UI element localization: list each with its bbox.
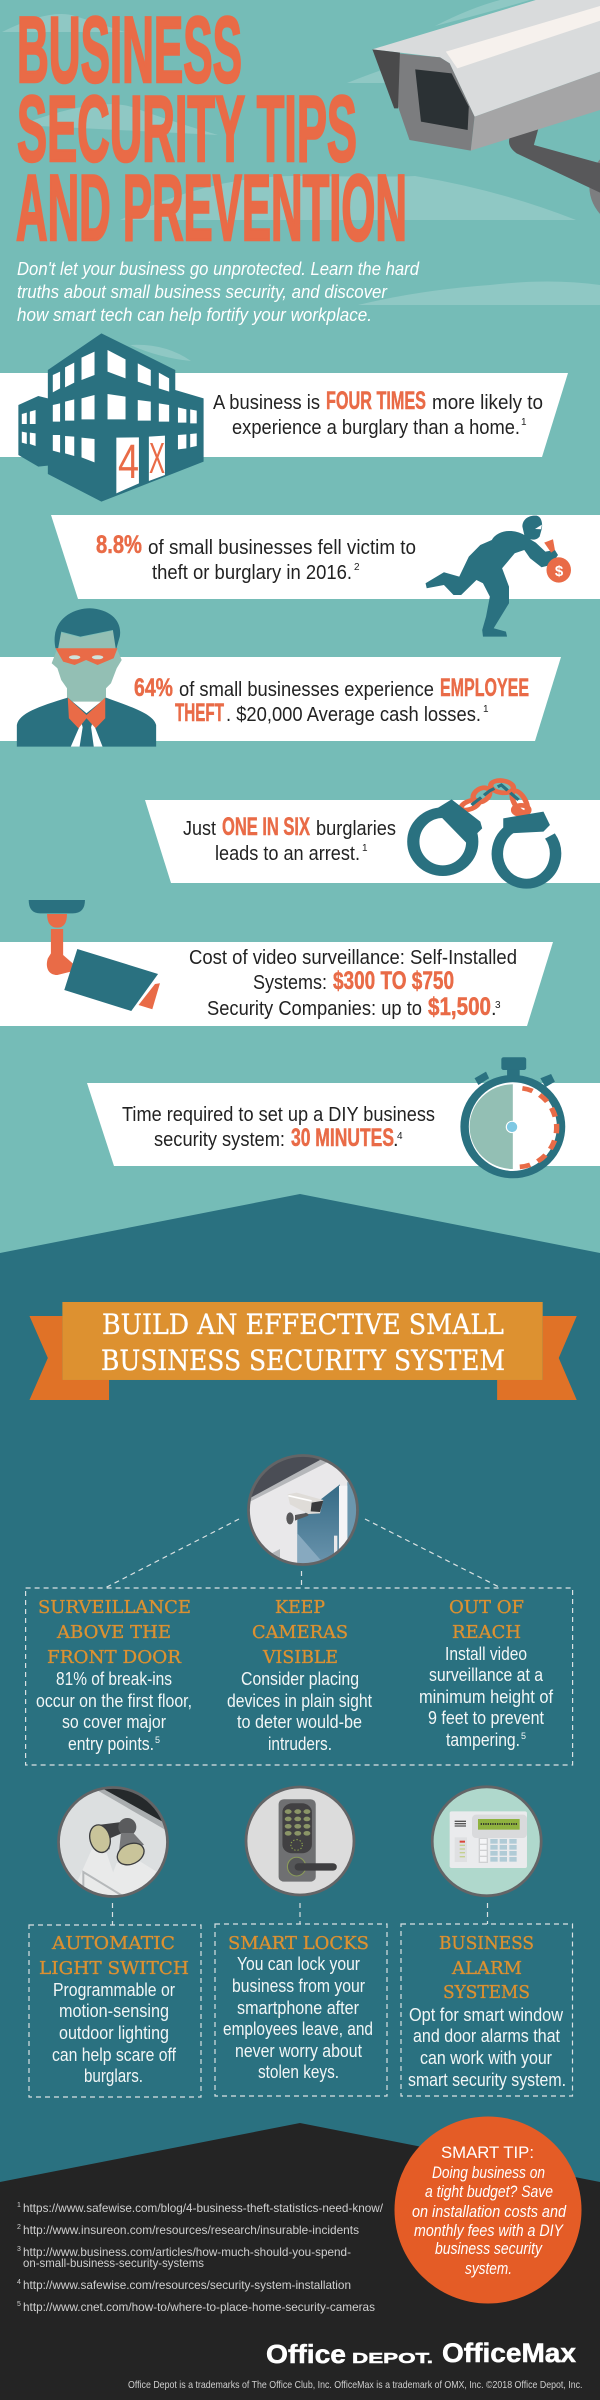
panel: business alarm systems: smart security system. [408, 2070, 566, 2090]
logo: Office Depot OfficeMax: Office [266, 2339, 346, 2369]
illustration: outdoor lights [58, 1786, 170, 1898]
stat text: of small businesses fell victim to [148, 537, 416, 559]
stat text: 30 MINUTES [291, 1124, 394, 1152]
icon: burglar with money bag [426, 516, 571, 637]
stat text: . $20,000 Average cash losses. [226, 704, 481, 726]
footnotes: http://www.business.com/articles/how-much-should-you-spend- [23, 2245, 351, 2259]
intro text [17, 258, 420, 325]
panel: smart locks: business from your [232, 1976, 365, 1996]
callout: smart tip: Doing business on [432, 2163, 545, 2182]
footnotes: 5 [17, 2301, 21, 2308]
panel: automatic light switch: Programmable or [53, 1980, 175, 2000]
panel: thirty minutes [87, 1057, 600, 1175]
icon: handcuffs [413, 779, 556, 884]
tip: out of reach: 9 feet to prevent [428, 1708, 544, 1728]
footnotes: http://www.insureon.com/resources/research/insurable-incidents [23, 2223, 359, 2237]
footer background [0, 2123, 600, 2400]
stat text: 4 [397, 1131, 403, 1142]
tip: surveillance above the front door: SURVEILLANCE [38, 1597, 191, 1618]
callout: smart tip: monthly fees with a DIY [414, 2221, 564, 2240]
icon: ceiling camera [29, 900, 160, 1011]
stat text: Systems: [253, 972, 327, 994]
panel: four times [0, 333, 568, 502]
stat text [134, 674, 529, 727]
stat text: 8.8% [96, 531, 142, 559]
footnotes: http://www.cnet.com/how-to/where-to-place-home-security-cameras [23, 2300, 375, 2314]
footnotes: 4 [17, 2279, 21, 2286]
title: BUSINESS [17, 0, 242, 102]
panel: four times: X [149, 434, 165, 483]
panel: smart locks: never worry about [235, 2041, 362, 2061]
tip: keep cameras visible [227, 1597, 372, 1754]
tip: keep cameras visible: devices in plain sight [227, 1691, 372, 1711]
stat text [122, 1104, 435, 1152]
footnotes: http://www.safewise.com/resources/security-system-installation [23, 2278, 351, 2292]
icon: office building [18, 333, 204, 502]
callout: smart tip: a tight budget? Save [425, 2182, 553, 2201]
panel: business alarm systems: and door alarms that [413, 2026, 560, 2046]
logo: Office Depot OfficeMax: OfficeMax [442, 2338, 576, 2368]
footnotes: 3 [17, 2246, 21, 2253]
illustration: alarm panel [432, 1787, 541, 1896]
panel: employee theft [0, 608, 561, 747]
panel: smart locks: SMART LOCKS [228, 1933, 369, 1954]
stat text: burglaries [316, 818, 396, 840]
illustration: camera above door [243, 1448, 360, 1565]
tip: surveillance above the front door: occur on the first floor, [36, 1691, 192, 1711]
panel: smart locks: stolen keys. [258, 2062, 339, 2082]
intro text: how smart tech can help fortify your workplace. [17, 304, 372, 325]
section heading ribbon: BUILD AN EFFECTIVE SMALL [102, 1308, 504, 1341]
tip: keep cameras visible: CAMERAS [252, 1622, 348, 1643]
stat text: . [491, 998, 497, 1020]
stat text: more likely to [432, 392, 543, 414]
tip: surveillance above the front door: so cover major [62, 1712, 166, 1732]
stat text [96, 531, 416, 584]
stat text: THEFT [175, 699, 224, 727]
panel: automatic light switch: motion-sensing [59, 2001, 169, 2021]
stat text: Just [183, 818, 216, 840]
callout: smart tip: on installation costs and [412, 2202, 566, 2221]
callout: smart tip: business security [435, 2239, 543, 2258]
tip: surveillance above the front door: 5 [155, 1735, 160, 1745]
panel: business alarm systems: Opt for smart window [409, 2005, 564, 2025]
panel: automatic light switch: AUTOMATIC [51, 1933, 175, 1954]
intro text: Don't let your business go unprotected. Learn the hard [17, 258, 420, 279]
panel: business alarm systems [401, 1924, 572, 2096]
tip: keep cameras visible: intruders. [268, 1734, 332, 1754]
stat text: 1 [521, 417, 527, 428]
footnotes: 2 [17, 2224, 21, 2231]
stat text: 3 [495, 1000, 501, 1011]
panel: automatic light switch: LIGHT SWITCH [39, 1958, 189, 1979]
footnotes: on-small-business-security-systems [23, 2256, 204, 2270]
panel: surveillance cost [0, 900, 553, 1026]
tip: surveillance above the front door: 81% of break-ins [56, 1669, 172, 1689]
panel: camera placement tips [26, 1588, 573, 1765]
tip: keep cameras visible: KEEP [275, 1597, 325, 1618]
stat text: 2 [354, 562, 360, 573]
callout: smart tip: system. [465, 2259, 512, 2278]
tip: out of reach: 5 [521, 1731, 526, 1741]
stat text: security system: [154, 1129, 285, 1151]
stat text: $300 TO $750 [333, 967, 454, 995]
tip: out of reach: surveillance at a [429, 1665, 544, 1685]
panel: business alarm systems: can work with your [420, 2048, 552, 2068]
logo: Office Depot OfficeMax [266, 2338, 576, 2369]
stat text [189, 947, 517, 1021]
stat text: leads to an arrest. [215, 843, 360, 865]
callout: smart tip: SMART TIP: [441, 2143, 534, 2162]
panel: smart locks [215, 1924, 387, 2096]
stat text: . [393, 1129, 399, 1151]
stat text: Cost of video surveillance: Self-Installed [189, 947, 517, 969]
connector lines [112, 1903, 488, 1925]
tip: out of reach: tampering. [446, 1730, 520, 1750]
panel: build section background [0, 1194, 600, 2400]
icon: security camera [372, 0, 600, 230]
icon: masked employee [17, 608, 156, 747]
tip: keep cameras visible: VISIBLE [262, 1647, 338, 1668]
tip: surveillance above the front door: entry points. [68, 1734, 154, 1754]
logo: Office Depot OfficeMax: DEPOT. [352, 2350, 433, 2367]
panel: smart locks: employees leave, and [223, 2019, 373, 2039]
stat text: Time required to set up a DIY business [122, 1104, 435, 1126]
stat text: theft or burglary in 2016. [152, 562, 352, 584]
stat text: experience a burglary than a home. [232, 417, 520, 439]
panel: smart locks: smartphone after [237, 1998, 359, 2018]
panel: smart locks: You can lock your [237, 1954, 360, 1974]
stat text: EMPLOYEE [440, 674, 529, 702]
title [16, 0, 407, 260]
section heading ribbon: BUSINESS SECURITY SYSTEM [101, 1344, 505, 1377]
stat text: ONE IN SIX [222, 813, 310, 841]
tip: surveillance above the front door: ABOVE THE [56, 1622, 171, 1643]
stat text: 1 [483, 704, 489, 715]
panel: 8.8 percent [51, 515, 600, 637]
panel: business alarm systems: ALARM [451, 1958, 522, 1979]
tip: out of reach: minimum height of [419, 1687, 554, 1707]
section heading ribbon [29, 1302, 577, 1400]
stat text [183, 813, 396, 865]
tip: out of reach: REACH [452, 1622, 521, 1643]
connector lines [105, 1519, 501, 1588]
panel: business alarm systems: SYSTEMS [443, 1982, 530, 2003]
panel: business alarm systems: BUSINESS [439, 1933, 534, 1954]
stat text: 64% [134, 674, 173, 702]
footnotes: https://www.safewise.com/blog/4-business-theft-statistics-need-know/ [23, 2201, 384, 2215]
stat text [213, 387, 543, 439]
tip: keep cameras visible: to deter would-be [237, 1712, 362, 1732]
tip: keep cameras visible: Consider placing [241, 1669, 359, 1689]
tip: surveillance above the front door [36, 1597, 192, 1754]
callout: smart tip [394, 2116, 582, 2304]
tip: surveillance above the front door: FRONT DOOR [47, 1647, 181, 1668]
tip: out of reach: OUT OF [449, 1597, 524, 1618]
tip: out of reach [419, 1597, 554, 1750]
panel: automatic light switch: outdoor lighting [59, 2023, 169, 2043]
panel: automatic light switch: burglars. [84, 2066, 143, 2086]
intro text: truths about small business security, and discover [17, 281, 388, 302]
stat text: $1,500 [428, 993, 491, 1021]
panel: 8.8 percent: $ [555, 563, 564, 580]
stat text: A business is [213, 392, 320, 414]
stat text: of small businesses experience [179, 679, 434, 701]
panel: four times: 4 [118, 436, 139, 489]
icon: stopwatch [465, 1057, 561, 1175]
panel: one in six [145, 779, 600, 884]
panel: automatic light switch [29, 1925, 201, 2097]
footnotes: 1 [17, 2202, 21, 2209]
stat text: Security Companies: up to [207, 998, 422, 1020]
stat text: 1 [362, 843, 368, 854]
panel: automatic light switch: can help scare off [52, 2045, 177, 2065]
tip: out of reach: Install video [445, 1644, 527, 1664]
illustration: smart lock [246, 1787, 354, 1895]
stat text: FOUR TIMES [326, 387, 426, 415]
footnotes [17, 2201, 384, 2314]
